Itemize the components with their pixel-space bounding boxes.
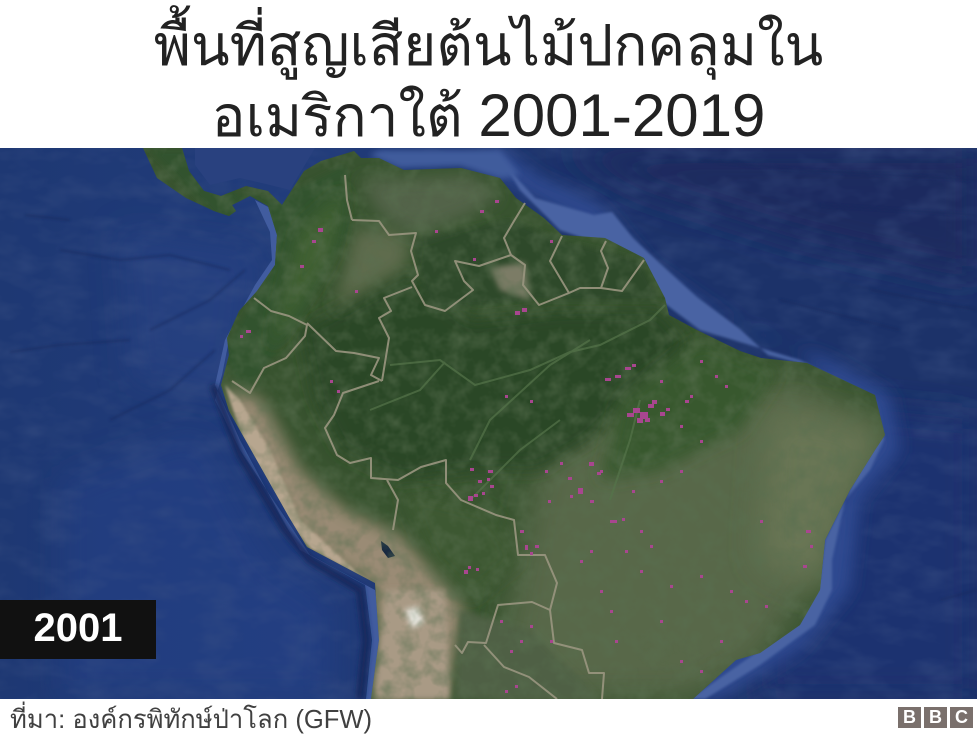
satellite map of South America	[0, 148, 977, 699]
eastern Brazil savanna	[490, 380, 890, 699]
continental shelf	[195, 148, 900, 699]
snow and salt flat	[405, 607, 424, 628]
lake titicaca	[381, 541, 395, 558]
BBC logo: C	[955, 707, 968, 727]
title: พื้นที่สูญเสียต้นไม้ปกคลุมใน	[154, 14, 823, 77]
colombia and central america	[182, 150, 347, 360]
BBC logo	[898, 707, 973, 728]
llanos and Venezuela	[335, 228, 410, 310]
country borders	[232, 175, 644, 699]
rivers	[370, 305, 665, 500]
title: อเมริกาใต้ 2001-2019	[212, 82, 765, 149]
land mass	[130, 148, 900, 699]
offshore trench	[213, 385, 366, 699]
title	[154, 5, 823, 149]
ocean	[0, 148, 977, 699]
seafloor ridges	[10, 160, 977, 600]
source note: ที่มา: องค์กรพิทักษ์ป่าโลก (GFW)	[10, 706, 372, 734]
tree cover loss markers	[240, 200, 813, 693]
BBC logo: B	[903, 707, 916, 727]
year label	[0, 600, 156, 659]
BBC logo: B	[929, 707, 942, 727]
amazon rainforest	[300, 270, 690, 480]
year label: 2001	[34, 606, 122, 650]
andes and desert	[225, 385, 465, 699]
